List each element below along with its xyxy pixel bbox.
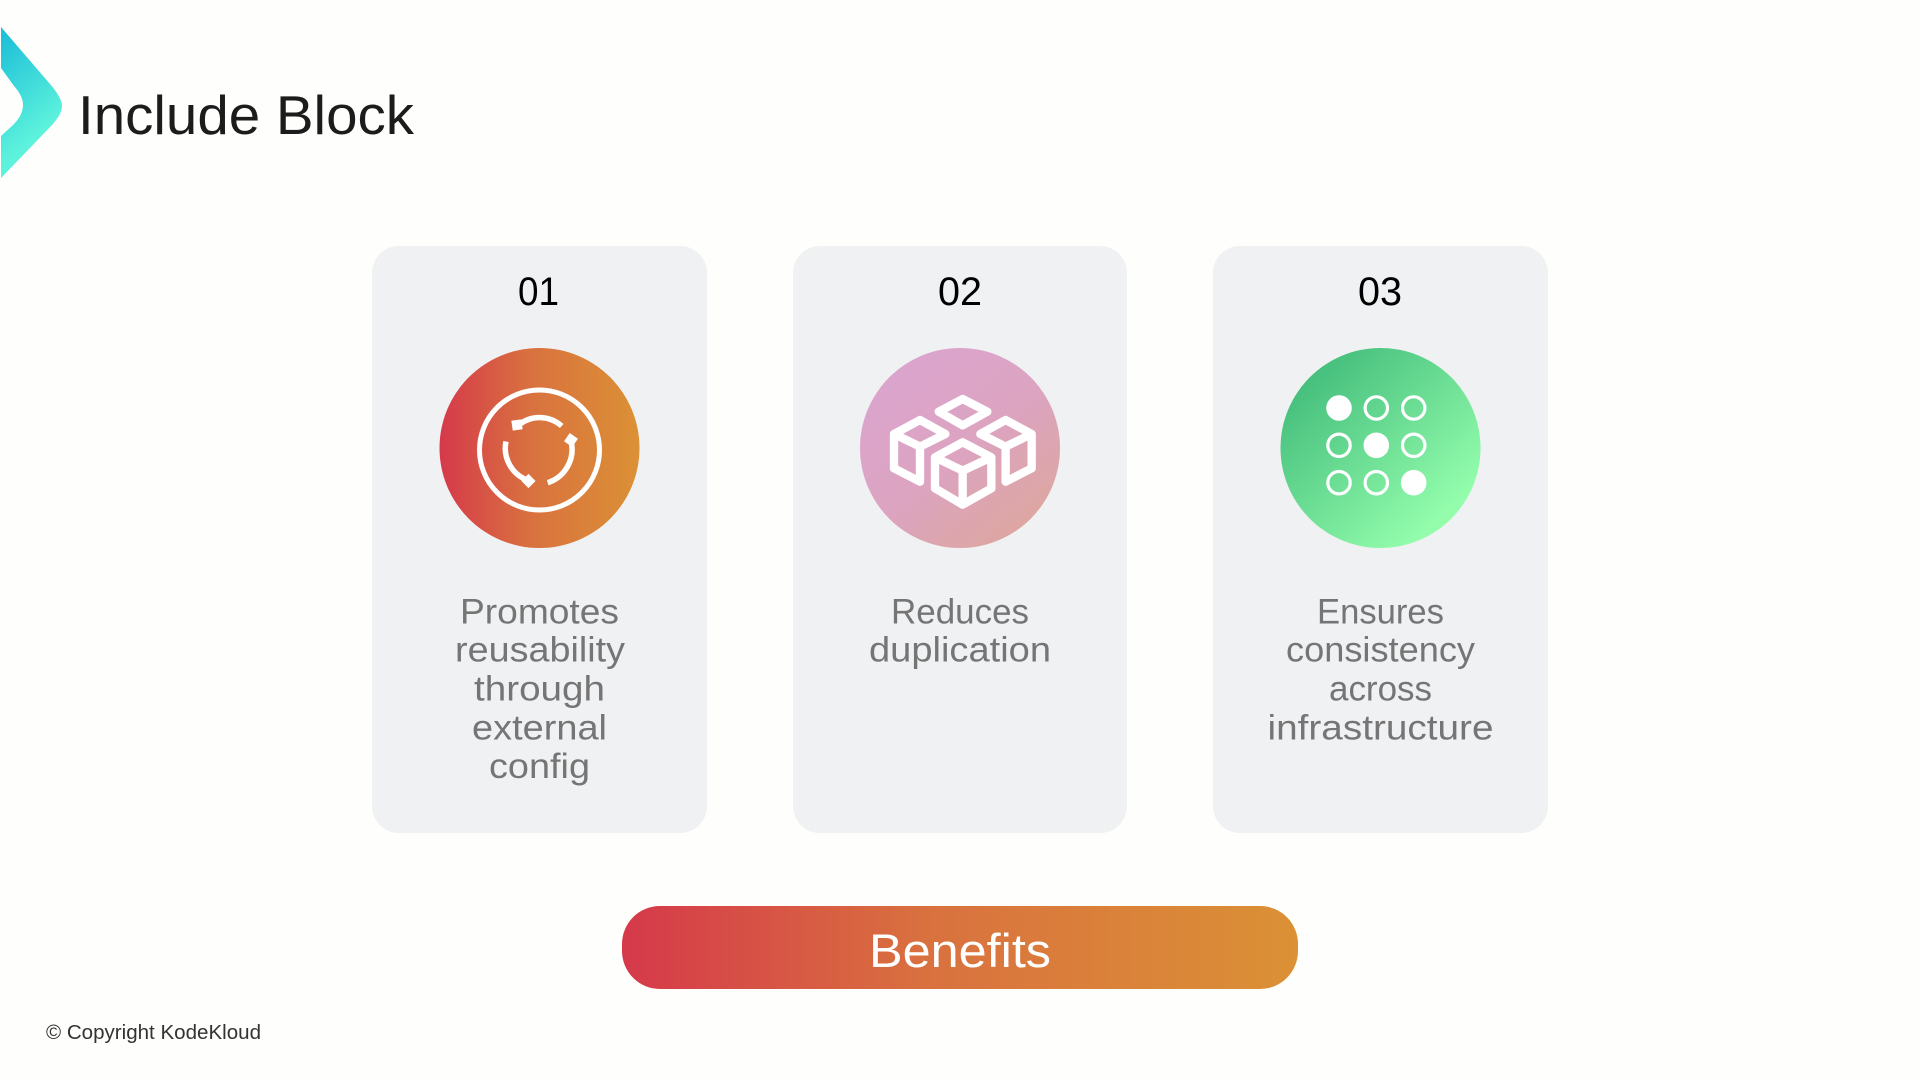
number 03: 03 [1358, 270, 1402, 314]
description 02: Reduces [891, 592, 1029, 632]
panel: card 03 [1213, 246, 1548, 833]
description 02 [869, 592, 1051, 670]
icon: chevron logo [1, 27, 62, 178]
copyright footer: © Copyright KodeKloud [46, 1022, 261, 1044]
description 03: consistency [1286, 630, 1476, 670]
description 03: across [1329, 670, 1432, 708]
card background [1213, 246, 1548, 833]
icon: dot grid circle [1280, 348, 1480, 548]
banner: benefits: Benefits [869, 924, 1051, 977]
description 03 [1268, 592, 1494, 748]
description 01: external [472, 708, 607, 748]
description 01: Promotes [460, 592, 619, 632]
description 02: duplication [869, 630, 1051, 670]
title: Include Block [78, 84, 414, 146]
icon: cubes circle [860, 348, 1060, 548]
panel: card 01 [372, 246, 707, 833]
icon: recycle circle [440, 348, 640, 548]
description 01: through [474, 670, 605, 708]
number 01: 01 [518, 270, 559, 314]
card background [793, 246, 1127, 833]
panel: card 02 [793, 246, 1127, 833]
banner: benefits [622, 906, 1298, 989]
description 03: infrastructure [1268, 708, 1494, 748]
number 02: 02 [938, 270, 982, 314]
description 03: Ensures [1317, 592, 1444, 632]
description 01: config [489, 747, 590, 786]
description 01: reusability [455, 630, 626, 670]
card background [372, 246, 707, 833]
description 01 [455, 592, 626, 786]
